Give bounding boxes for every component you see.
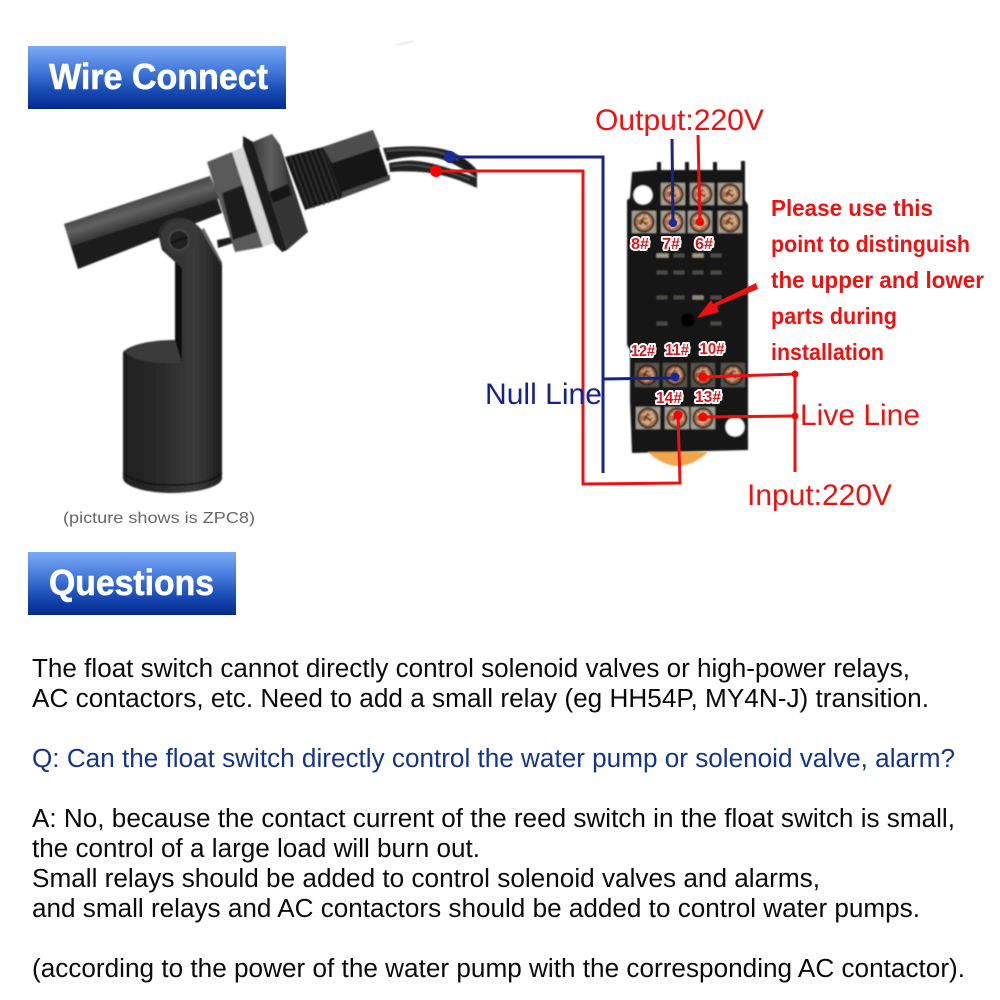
arm — [64, 176, 222, 269]
terminal labels: 12# — [631, 343, 655, 360]
terminal labels: 14# — [656, 390, 682, 407]
text block: answer: the control of a large load will burn out. — [32, 835, 480, 863]
banner: Wire Connect — [28, 46, 286, 109]
text block: footnote: (according to the power of the water pump with the corresponding AC contactor). — [32, 955, 965, 983]
inner nut — [207, 152, 263, 252]
mounting holes — [634, 186, 744, 436]
relay socket — [627, 161, 748, 466]
text block: intro — [32, 655, 929, 713]
white washer — [232, 147, 274, 247]
terminal labels: 13# — [695, 389, 721, 406]
socket body — [627, 161, 748, 453]
float cylinder — [123, 340, 222, 493]
wiring: null line in blue — [444, 139, 680, 473]
caption: picture note: (picture shows is ZPC8) — [63, 510, 255, 527]
text block: intro: AC contactors, etc. Need to add a small relay (eg HH54P, MY4N-J) transition. — [32, 685, 929, 713]
wiring: live line in red — [430, 135, 798, 484]
terminal labels: 7# — [662, 236, 680, 253]
terminal labels: 11# — [665, 342, 689, 359]
text block: intro: The float switch cannot directly control solenoid valves or high-power relays, — [32, 655, 910, 683]
threaded stem — [285, 147, 342, 210]
terminal labels: 10# — [700, 341, 725, 358]
banner: Questions — [28, 552, 236, 615]
text block: answer: A: No, because the contact current of the reed switch in the float switch is small, — [32, 805, 955, 833]
hex tip — [323, 130, 390, 198]
label: null line: Null Line — [485, 378, 602, 411]
wires — [383, 146, 477, 188]
label: output voltage: Output:220V — [595, 104, 764, 137]
icon: float switch product photo — [64, 130, 477, 493]
terminal labels — [631, 236, 725, 407]
note: installation orientation: point to distinguish — [771, 231, 970, 257]
note: installation orientation: installation — [771, 339, 884, 365]
text block: answer — [32, 805, 955, 923]
pivot screw — [161, 221, 195, 255]
banner: Wire Connect: Wire Connect — [49, 56, 268, 97]
orange base — [648, 452, 708, 466]
banner: Questions: Questions — [49, 562, 214, 603]
note: installation orientation — [771, 195, 984, 365]
label: input voltage: Input:220V — [747, 479, 892, 512]
terminals — [632, 183, 745, 429]
gap under arm — [205, 223, 233, 248]
flange — [243, 136, 287, 252]
socket slots — [656, 253, 722, 326]
terminal labels: 8# — [631, 236, 649, 253]
text block: answer: Small relays should be added to control solenoid valves and alarms, — [32, 865, 820, 893]
arrow: orientation point — [697, 283, 758, 318]
text block: question: Q: Can the float switch directly control the water pump or solenoid valve, alarm? — [32, 745, 955, 773]
terminal labels: 6# — [695, 236, 713, 253]
text block: answer: and small relays and AC contactors should be added to control water pumps. — [32, 895, 920, 923]
stem — [158, 218, 222, 370]
note: installation orientation: Please use this — [771, 195, 933, 221]
faint smudge — [395, 39, 415, 47]
outer nut — [253, 134, 308, 250]
note: installation orientation: parts during — [771, 303, 897, 329]
note: installation orientation: the upper and lower — [771, 267, 984, 293]
label: live line: Live Line — [800, 399, 920, 432]
